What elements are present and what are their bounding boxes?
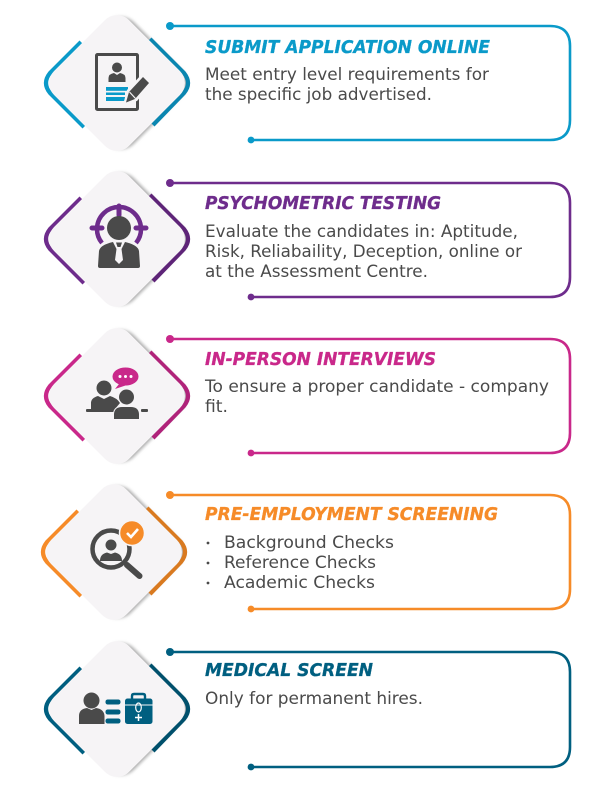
heading 2: PSYCHOMETRIC TESTING bbox=[205, 194, 441, 214]
step 4: pre-employment screening bbox=[39, 477, 570, 627]
body text 2: Evaluate the candidates in: Aptitude, bbox=[205, 222, 518, 241]
icon: interview with speech bubble bbox=[86, 368, 148, 420]
body text 2 bbox=[205, 222, 522, 281]
icon: magnifier with check badge bbox=[92, 520, 144, 576]
body text 2: at the Assessment Centre. bbox=[205, 262, 428, 281]
bullet list 4: Academic Checks bbox=[224, 573, 375, 592]
bullet list 4: Background Checks bbox=[224, 533, 394, 552]
panel outline 5 bbox=[166, 648, 570, 770]
step 3: in-person interviews bbox=[42, 321, 570, 471]
diamond badge 5 bbox=[42, 634, 195, 784]
panel outline 4 bbox=[166, 491, 570, 612]
heading 3: IN-PERSON INTERVIEWS bbox=[205, 350, 436, 370]
body text 1: the specific job advertised. bbox=[205, 85, 432, 104]
body text 3: To ensure a proper candidate - company bbox=[204, 377, 549, 396]
bullet list 4 bbox=[207, 533, 394, 592]
diamond badge 2 bbox=[42, 164, 195, 314]
diamond badge 3 bbox=[42, 321, 195, 471]
bullet list 4: Reference Checks bbox=[224, 553, 376, 572]
step 5: medical screen bbox=[42, 634, 570, 784]
body text 1 bbox=[205, 65, 489, 104]
step 2: psychometric testing bbox=[42, 164, 570, 314]
heading 4: PRE-EMPLOYMENT SCREENING bbox=[205, 505, 498, 525]
icon: candidate in target bbox=[92, 206, 146, 268]
diamond badge 4 bbox=[39, 477, 192, 627]
panel outline 3 bbox=[166, 335, 570, 456]
panel outline 2 bbox=[166, 179, 570, 300]
body text 5: Only for permanent hires. bbox=[205, 689, 423, 708]
body text 3 bbox=[204, 377, 549, 416]
panel outline 1 bbox=[166, 22, 570, 143]
body text 1: Meet entry level requirements for bbox=[205, 65, 489, 84]
step 1: submit application online bbox=[42, 8, 570, 158]
diamond badge 1 bbox=[42, 8, 195, 158]
body text 3: fit. bbox=[205, 397, 228, 416]
icon: application form with pencil bbox=[96, 54, 152, 110]
heading 1: SUBMIT APPLICATION ONLINE bbox=[205, 38, 490, 58]
heading 5: MEDICAL SCREEN bbox=[205, 661, 373, 681]
body text 2: Risk, Reliabaility, Deception, online or bbox=[205, 242, 522, 261]
icon: person, list and medical case bbox=[79, 692, 152, 724]
